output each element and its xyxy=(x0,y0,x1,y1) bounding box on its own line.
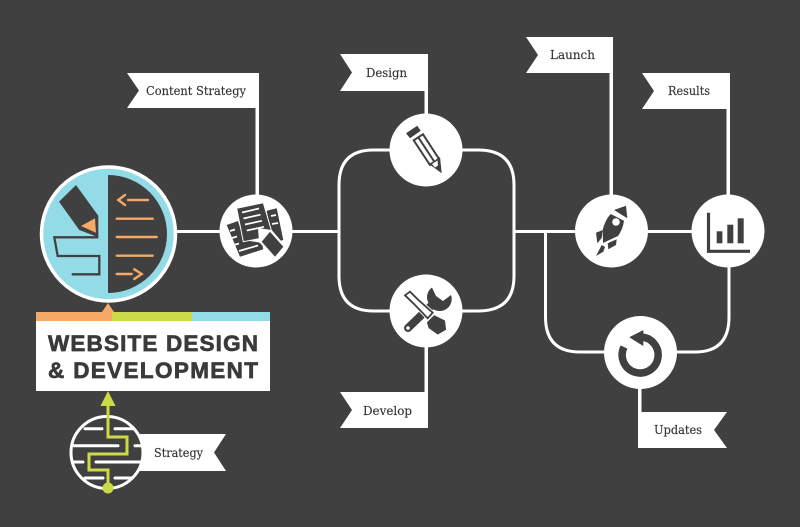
flag: Design: Design xyxy=(366,65,407,80)
pencil drawing a line xyxy=(54,185,99,274)
flag: Updates xyxy=(638,385,727,448)
small pencil xyxy=(258,228,286,259)
orange arrows and lines xyxy=(117,195,157,279)
screwdriver xyxy=(405,292,445,334)
dark half with list xyxy=(108,175,167,293)
green route arrow xyxy=(89,391,127,494)
node: tools icon xyxy=(390,274,462,348)
flag: Launch: Launch xyxy=(550,47,595,62)
flag: Content Strategy: Content Strategy xyxy=(146,83,247,98)
node: documents icon xyxy=(220,194,292,268)
connector lines xyxy=(172,150,729,352)
flag: Updates: Updates xyxy=(654,422,702,437)
title panel: WEBSITE DESIGN xyxy=(48,331,258,356)
flag: Strategy xyxy=(135,434,226,471)
flag: Develop xyxy=(340,345,428,428)
flag: Results xyxy=(642,73,730,197)
flag: Develop: Develop xyxy=(363,403,412,418)
node: bar chart icon xyxy=(692,194,764,268)
node: updates icon xyxy=(604,316,677,389)
flag: Content Strategy xyxy=(127,73,259,195)
wrench xyxy=(406,288,452,330)
colour bar xyxy=(36,303,270,321)
node: rocket icon xyxy=(575,194,648,268)
node: pencil icon xyxy=(390,114,462,186)
title panel: & DEVELOPMENT xyxy=(48,358,258,383)
strategy maze icon xyxy=(71,391,143,494)
flag: Results: Results xyxy=(668,83,710,98)
flag: Launch xyxy=(526,37,613,197)
main circle illustration xyxy=(42,167,176,301)
title panel xyxy=(36,303,270,391)
flag: Strategy: Strategy xyxy=(154,445,204,460)
flag: Design xyxy=(340,54,428,115)
